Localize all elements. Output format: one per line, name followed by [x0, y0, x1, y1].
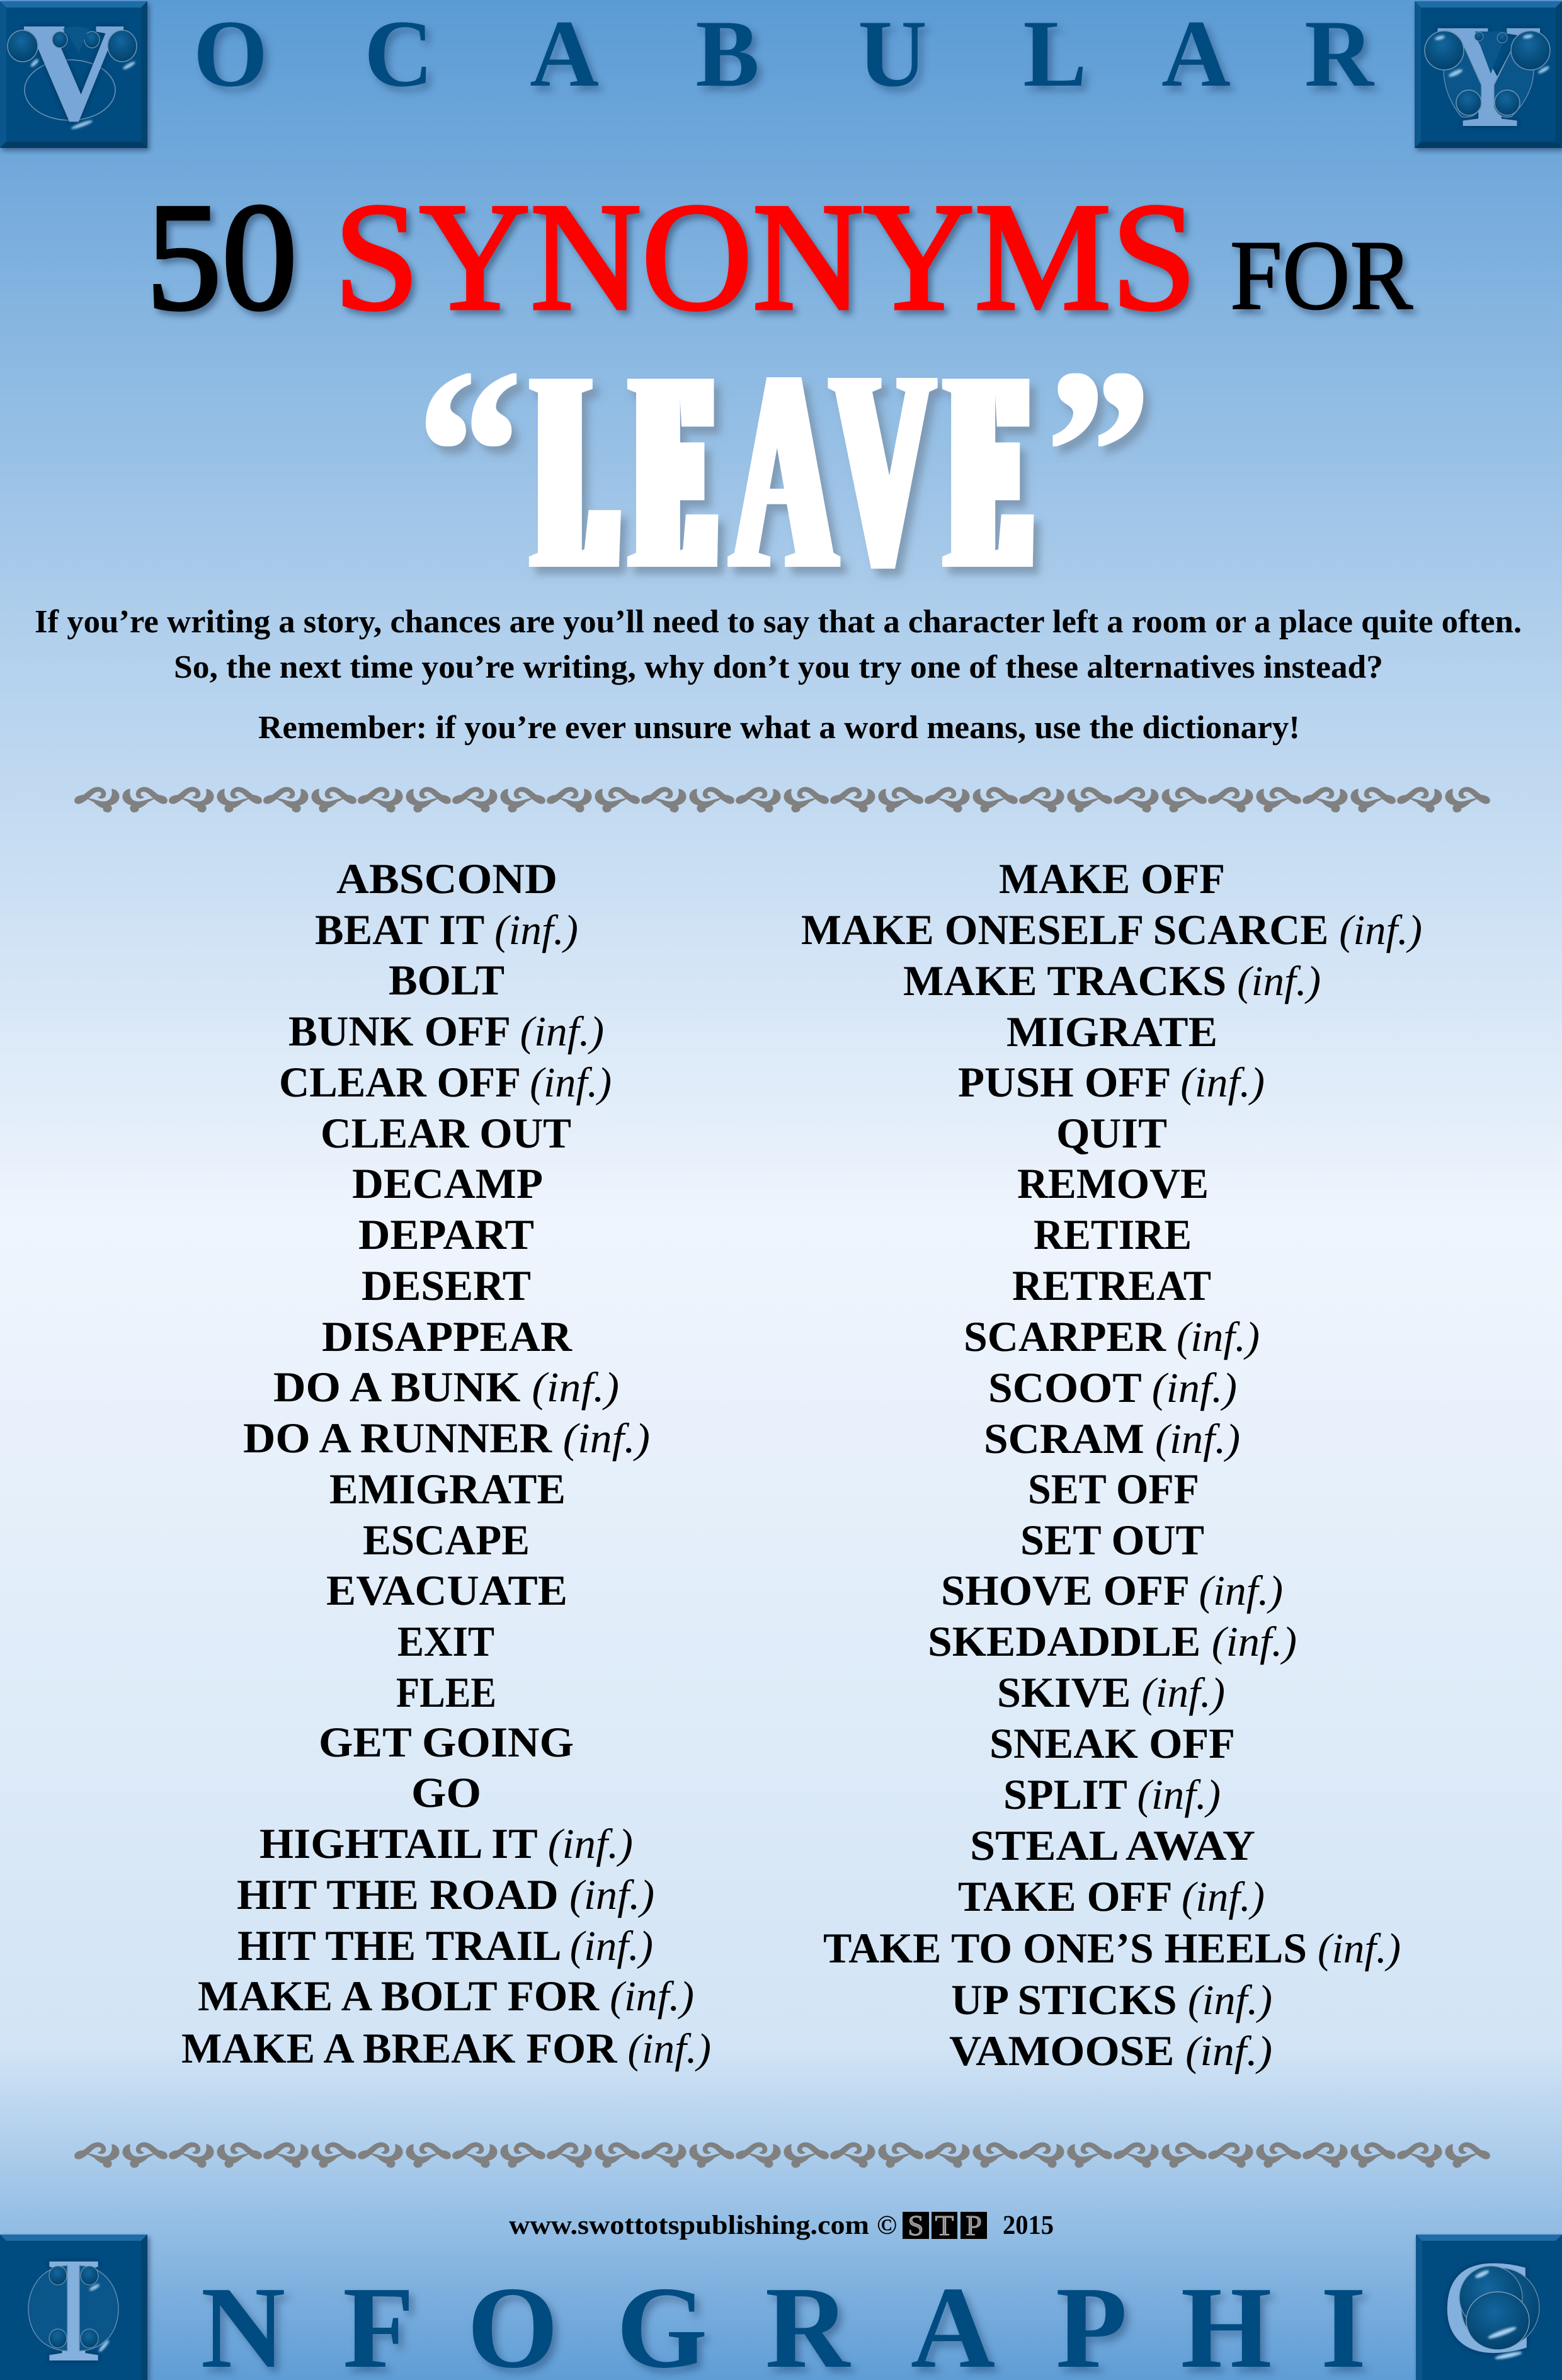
- word list: left column: BUNK OFF (inf.): [288, 1007, 604, 1055]
- word list: right column: SCRAM (inf.): [984, 1415, 1240, 1462]
- word list: left column: DECAMP: [352, 1159, 543, 1207]
- word list: left column: [181, 855, 711, 2072]
- word list: right column: MAKE ONESELF SCARCE (inf.): [801, 906, 1422, 954]
- word list: right column: SNEAK OFF: [989, 1719, 1235, 1767]
- footer credit line: [509, 2209, 1054, 2241]
- word list: right column: SET OUT: [1020, 1516, 1204, 1564]
- word list: right column: MAKE TRACKS (inf.): [903, 957, 1321, 1005]
- footer year: 2015: [1003, 2211, 1054, 2240]
- ornamental divider: top: [75, 787, 1490, 812]
- icon: letter V tile: [0, 0, 147, 151]
- word list: left column: FLEE: [396, 1668, 496, 1716]
- word list: right column: SPLIT (inf.): [1003, 1770, 1221, 1818]
- word list: left column: EXIT: [397, 1617, 494, 1665]
- title word LEAVE in quotes: A: [734, 312, 834, 630]
- word list: left column: CLEAR OFF (inf.): [279, 1058, 612, 1106]
- footer website: www.swottotspublishing.com: [509, 2211, 869, 2240]
- word list: left column: BEAT IT (inf.): [315, 906, 578, 954]
- word list: right column: VAMOOSE (inf.): [949, 2027, 1272, 2075]
- heading: bottom banner letters NFOGRAPHI: [201, 2263, 1366, 2380]
- title word LEAVE in quotes: ”: [1047, 319, 1151, 586]
- heading: top banner letters OCABULAR: [193, 1, 1375, 106]
- heading: top banner letters OCABULAR: C: [364, 1, 433, 106]
- icon: letter C tile: [1416, 2233, 1562, 2380]
- title word LEAVE in quotes: L: [541, 312, 612, 630]
- word list: right column: [801, 855, 1422, 2075]
- word list: left column: HIT THE ROAD (inf.): [237, 1870, 654, 1918]
- word list: left column: MAKE A BREAK FOR (inf.): [181, 2024, 711, 2072]
- word list: left column: HIGHTAIL IT (inf.): [259, 1819, 633, 1867]
- word list: left column: EVACUATE: [326, 1566, 567, 1614]
- word list: left column: ABSCOND: [336, 855, 557, 902]
- title word LEAVE in quotes: E: [639, 312, 710, 630]
- logo: STP boxes: S: [908, 2209, 924, 2241]
- word list: right column: RETREAT: [1012, 1261, 1211, 1309]
- word list: left column: DESERT: [362, 1261, 531, 1309]
- heading: top banner letters OCABULAR: A: [1161, 1, 1231, 106]
- footer copyright symbol: ©: [877, 2211, 897, 2240]
- word list: right column: REMOVE: [1017, 1159, 1209, 1207]
- word list: left column: CLEAR OUT: [321, 1109, 571, 1157]
- word list: right column: UP STICKS (inf.): [951, 1976, 1272, 2024]
- intro line 3: Remember: if you’re ever unsure what a word means, use the dictionary!: [258, 710, 1300, 746]
- word list: left column: ESCAPE: [363, 1516, 530, 1564]
- logo: STP boxes: P: [966, 2209, 982, 2241]
- intro line 1: If you’re writing a story, chances are you’ll need to say that a character left a room or a place quite often.: [35, 604, 1522, 640]
- word list: right column: MAKE OFF: [999, 855, 1225, 902]
- title word LEAVE in quotes: V: [834, 312, 932, 627]
- title word LEAVE in quotes: E: [954, 312, 1025, 630]
- word list: right column: TAKE TO ONE’S HEELS (inf.): [823, 1924, 1401, 1972]
- title word FOR: FOR: [1230, 220, 1413, 331]
- word list: right column: SKEDADDLE (inf.): [928, 1617, 1297, 1665]
- word list: left column: GET GOING: [319, 1718, 574, 1766]
- title: 50 SYNONYMS FOR: [146, 171, 1413, 342]
- word list: left column: HIT THE TRAIL (inf.): [237, 1922, 653, 1969]
- heading: top banner letters OCABULAR: O: [193, 1, 268, 106]
- word list: right column: RETIRE: [1034, 1210, 1192, 1258]
- word list: right column: MIGRATE: [1006, 1008, 1217, 1056]
- word list: left column: GO: [411, 1768, 481, 1816]
- word list: right column: QUIT: [1056, 1109, 1167, 1157]
- word list: left column: DO A RUNNER (inf.): [243, 1414, 650, 1462]
- word list: left column: DO A BUNK (inf.): [273, 1363, 619, 1411]
- intro text block: [35, 604, 1522, 746]
- icon: letter C tile: C: [1440, 2233, 1537, 2380]
- logo: STP boxes: T: [935, 2209, 954, 2241]
- heading: top banner letters OCABULAR: B: [695, 1, 760, 106]
- logo: STP boxes: [903, 2209, 987, 2241]
- word list: right column: SCARPER (inf.): [964, 1312, 1260, 1360]
- word list: left column: DISAPPEAR: [322, 1312, 573, 1360]
- title word LEAVE in quotes: [418, 312, 1151, 630]
- intro line 2: So, the next time you’re writing, why don’t you try one of these alternatives instead?: [174, 649, 1383, 685]
- word list: right column: SET OFF: [1028, 1465, 1199, 1513]
- heading: top banner letters OCABULAR: A: [530, 1, 599, 106]
- word list: left column: BOLT: [389, 956, 505, 1004]
- word list: left column: EMIGRATE: [329, 1465, 566, 1513]
- word list: left column: DEPART: [358, 1210, 534, 1258]
- word list: right column: SHOVE OFF (inf.): [941, 1566, 1283, 1614]
- ornamental divider: bottom: [75, 2143, 1490, 2167]
- word list: left column: MAKE A BOLT FOR (inf.): [198, 1972, 694, 2020]
- word list: right column: SKIVE (inf.): [997, 1668, 1225, 1716]
- title word LEAVE in quotes: “: [418, 319, 522, 586]
- word list: right column: STEAL AWAY: [970, 1821, 1255, 1869]
- title word SYNONYMS: SYNONYMS: [334, 171, 1197, 342]
- heading: top banner letters OCABULAR: R: [1304, 1, 1375, 106]
- icon: letter I tile: [0, 2226, 147, 2380]
- word list: right column: SCOOT (inf.): [988, 1364, 1237, 1411]
- word list: right column: TAKE OFF (inf.): [958, 1872, 1265, 1920]
- heading: top banner letters OCABULAR: L: [1023, 1, 1087, 106]
- word list: right column: PUSH OFF (inf.): [958, 1058, 1265, 1106]
- heading: top banner letters OCABULAR: U: [858, 1, 927, 106]
- title number: 50: [146, 171, 297, 342]
